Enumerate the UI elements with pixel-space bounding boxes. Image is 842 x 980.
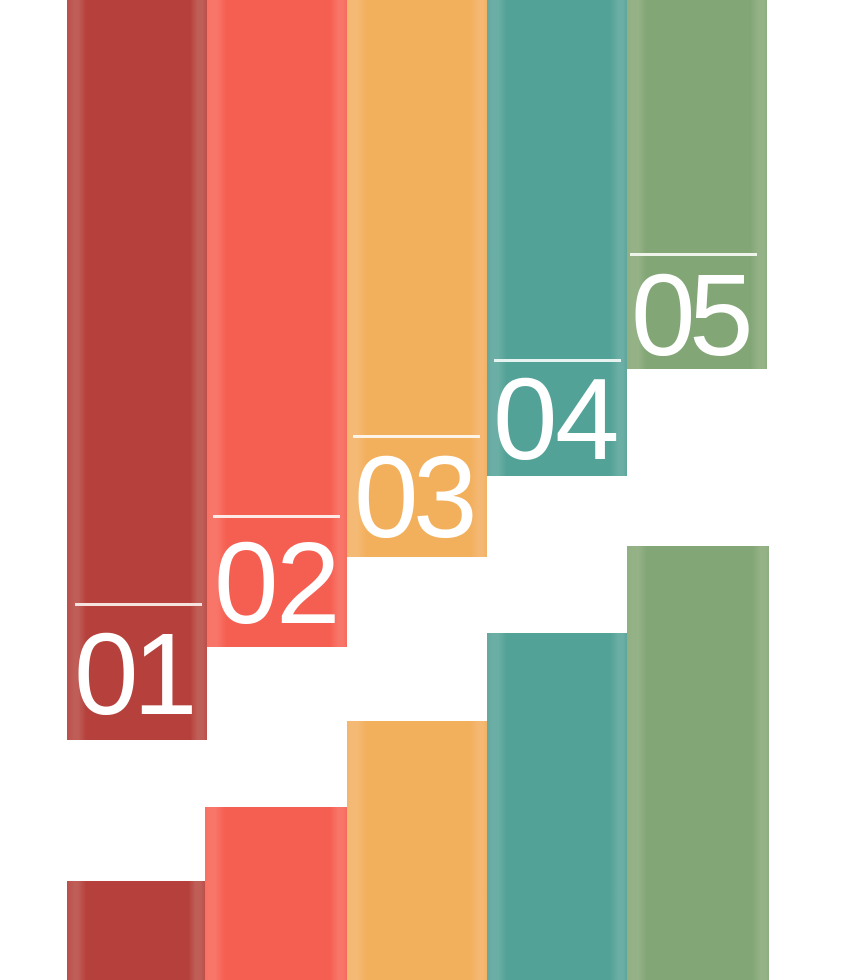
upper bar 05	[627, 0, 767, 369]
lower bar 01	[67, 881, 205, 980]
column 02	[205, 0, 347, 980]
rule 05	[630, 253, 757, 256]
upper bar 01	[67, 0, 207, 740]
number 05: 05	[631, 250, 754, 380]
rule 04	[494, 359, 621, 362]
upper bar 04	[487, 0, 627, 476]
number 03: 03	[354, 432, 478, 562]
column 01	[67, 0, 207, 980]
rule 01	[75, 603, 202, 606]
upper bar 02	[207, 0, 347, 647]
number 04: 04	[493, 354, 620, 484]
column 03	[347, 0, 487, 980]
rule 03	[353, 435, 480, 438]
rule 02	[213, 515, 340, 518]
lower bar 03	[347, 721, 487, 980]
lower bar 02	[205, 807, 347, 980]
lower bar 05	[627, 546, 769, 980]
column 05	[627, 0, 769, 980]
number 02: 02	[214, 518, 341, 648]
upper bar 03	[347, 0, 487, 557]
lower bar 04	[487, 633, 627, 980]
number 01: 01	[74, 609, 198, 739]
column 04	[487, 0, 627, 980]
